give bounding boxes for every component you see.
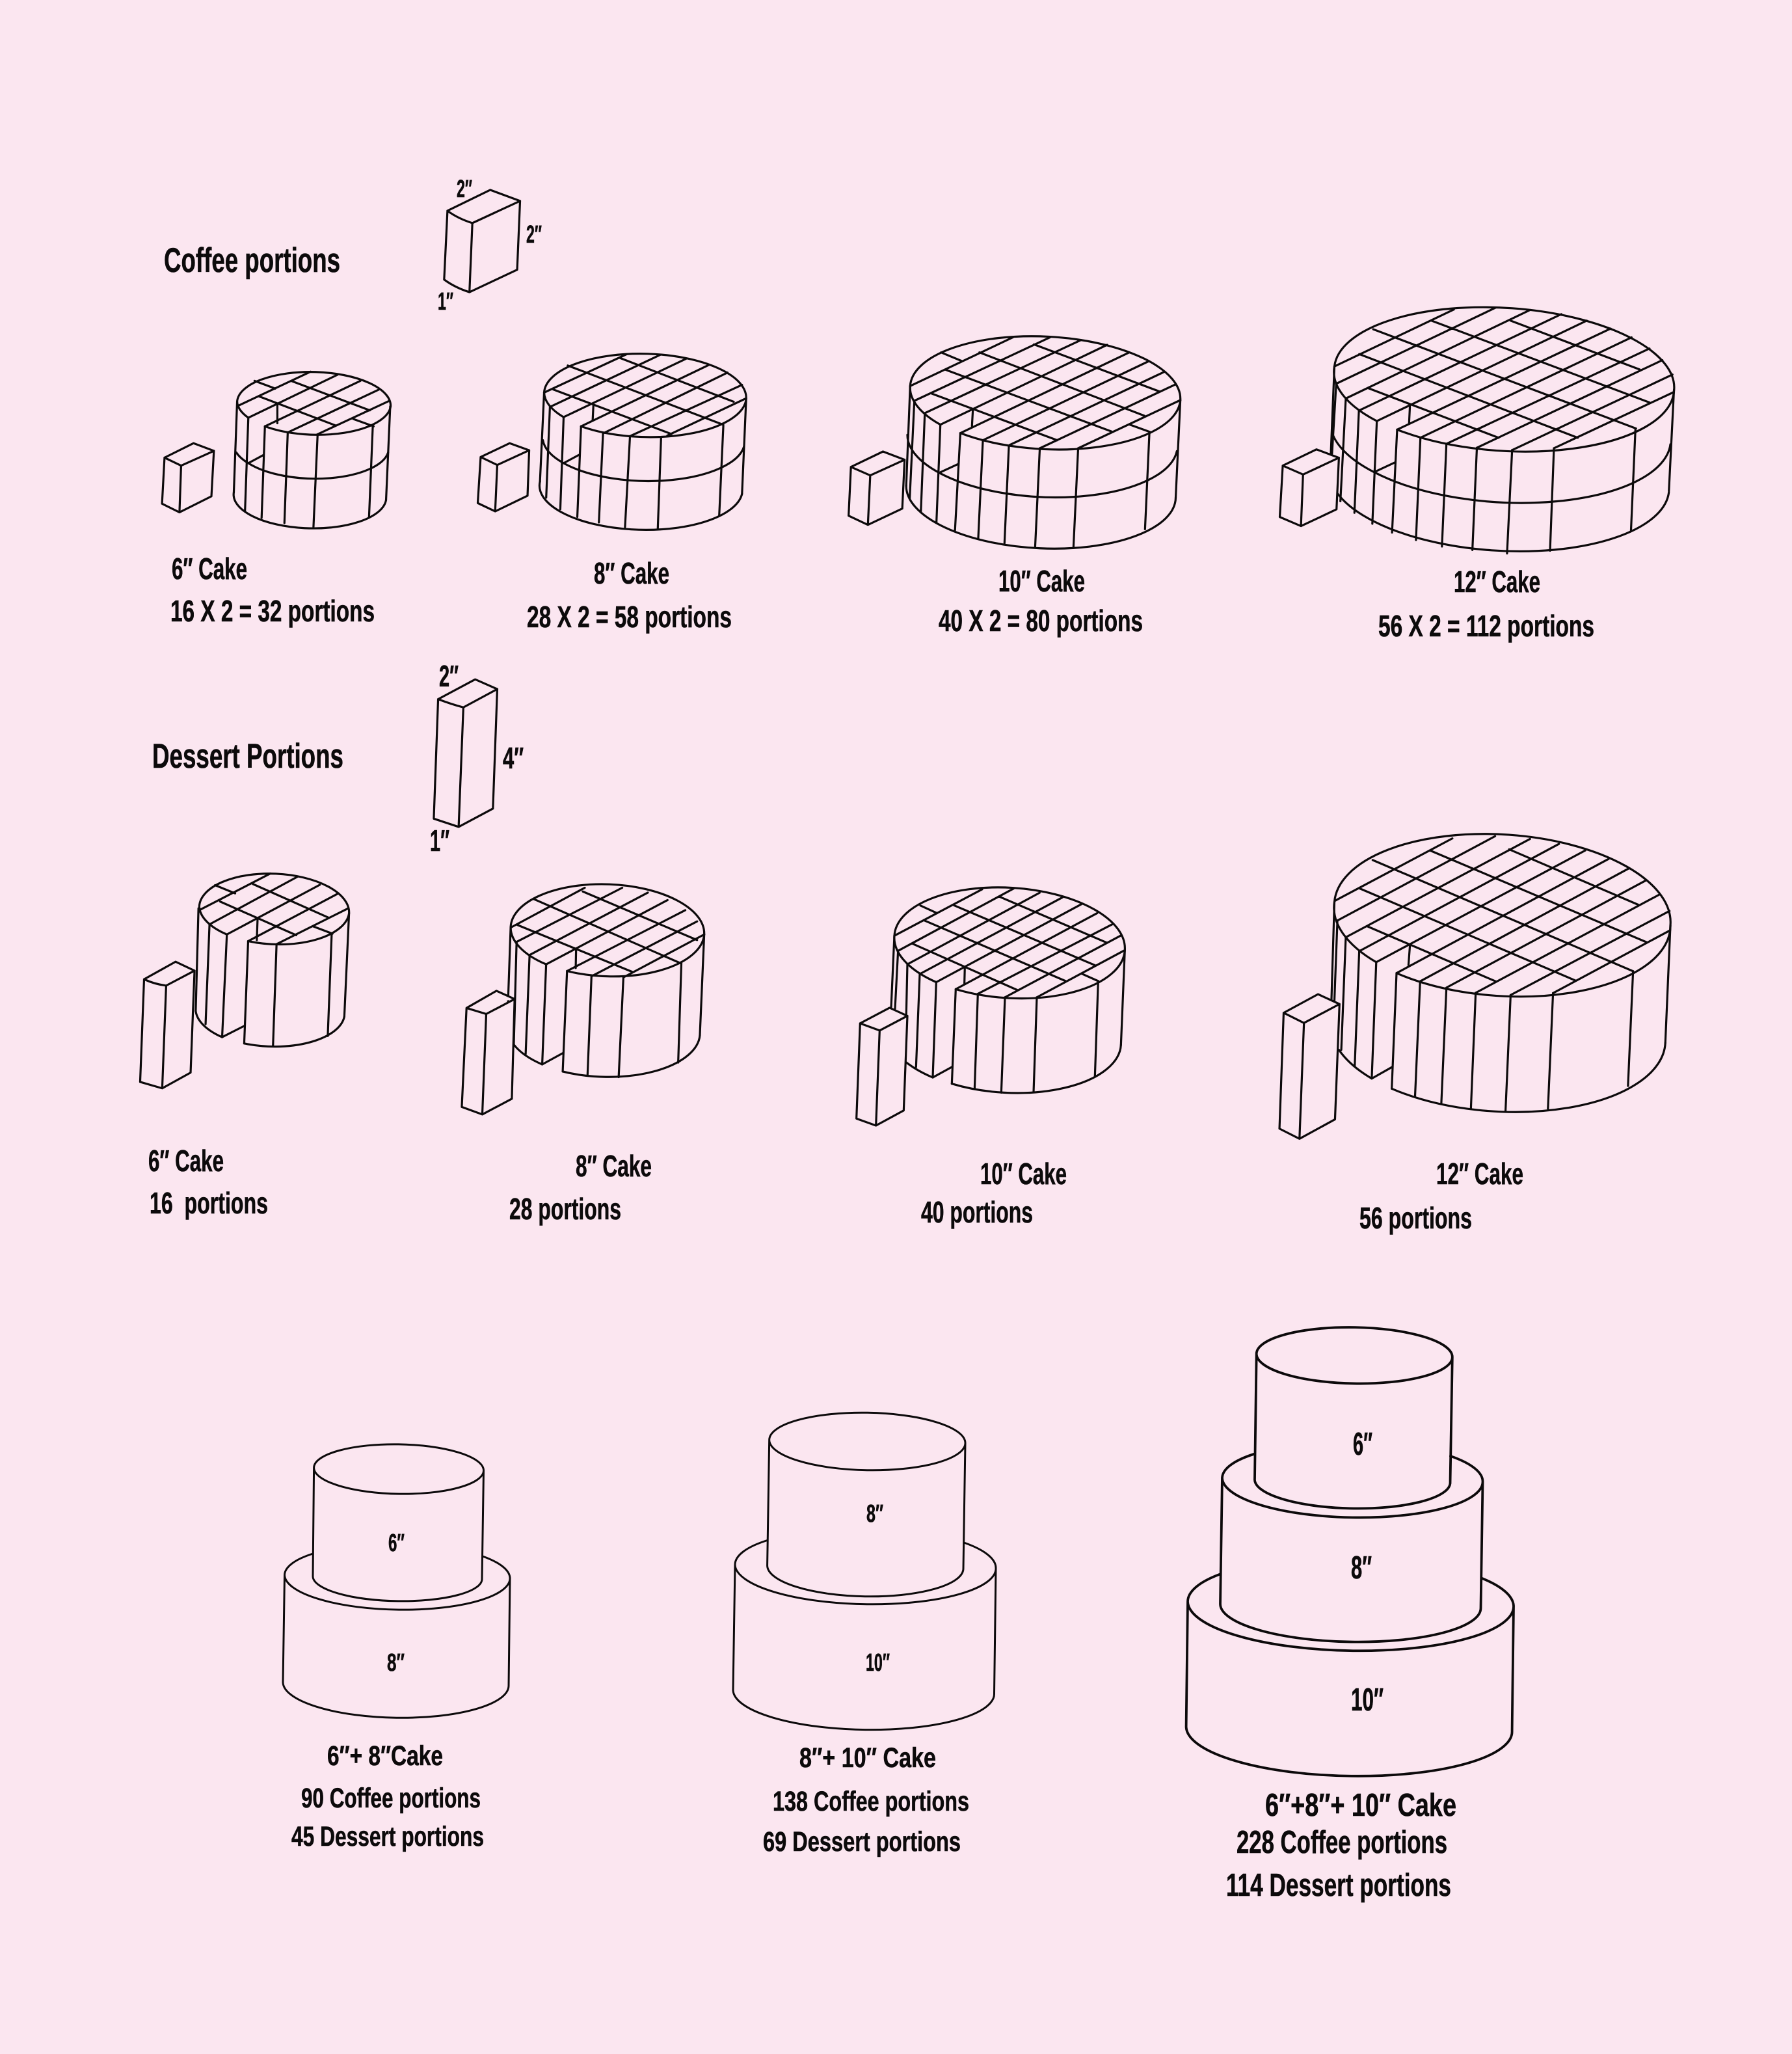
label: 10 inch dessert: 10″ Cake bbox=[980, 1157, 1067, 1191]
section: coffee portions bbox=[162, 176, 1674, 643]
label: three tier 6, 8 and 10 inch: 228 Coffee portions bbox=[1237, 1825, 1447, 1860]
label: two tier 6 and 8 inch bbox=[291, 1740, 484, 1852]
label: two tier 6 and 8 inch: 6″+ 8″Cake bbox=[327, 1740, 443, 1772]
dessert portion block bbox=[857, 1008, 907, 1126]
label: 8 inch dessert: 8″ Cake bbox=[576, 1149, 652, 1183]
cake: 8 inch dessert bbox=[462, 884, 704, 1115]
label: 6 inch coffee: 16 X 2 = 32 portions bbox=[170, 594, 375, 628]
label: 12 inch dessert: 12″ Cake bbox=[1436, 1157, 1523, 1191]
section: tiered cakes bbox=[283, 1327, 1514, 1903]
label: 10 inch coffee: 40 X 2 = 80 portions bbox=[939, 604, 1143, 638]
label: two tier 8 and 10 inch bbox=[763, 1742, 969, 1858]
label: 10 inch dessert: 40 portions bbox=[921, 1195, 1033, 1229]
icon: coffee portion block with dimensions bbox=[438, 176, 542, 316]
label: 12 inch dessert bbox=[1359, 1157, 1523, 1235]
label: 6 inch coffee: 6″ Cake bbox=[172, 552, 247, 586]
cake: three tier 6, 8 and 10 inch: 10″ bbox=[1351, 1682, 1384, 1718]
section: dessert portions bbox=[140, 659, 1670, 1235]
dessert portion block bbox=[1279, 994, 1339, 1139]
icon: coffee portion block with dimensions: 2″ bbox=[526, 221, 542, 249]
cake: 8 inch coffee bbox=[477, 354, 746, 530]
label: three tier 6, 8 and 10 inch: 114 Dessert portions bbox=[1226, 1868, 1451, 1903]
label: two tier 8 and 10 inch: 8″+ 10″ Cake bbox=[799, 1742, 936, 1774]
icon: coffee portion block with dimensions: 1″ bbox=[438, 288, 453, 316]
label: 12 inch coffee: 56 X 2 = 112 portions bbox=[1378, 609, 1594, 643]
coffee portion block bbox=[162, 443, 214, 512]
label: 8 inch dessert: 28 portions bbox=[509, 1192, 621, 1226]
icon: dessert portion block with dimensions: 1″ bbox=[430, 824, 449, 858]
cake: three tier 6, 8 and 10 inch bbox=[1186, 1327, 1514, 1776]
label: 6 inch dessert bbox=[148, 1144, 268, 1220]
cake: two tier 8 and 10 inch: 8″ bbox=[866, 1500, 883, 1528]
cake: 10 inch dessert bbox=[857, 887, 1125, 1126]
cake: two tier 8 and 10 inch bbox=[733, 1412, 996, 1730]
cake: two tier 6 and 8 inch: 8″ bbox=[387, 1649, 405, 1677]
heading: dessert portions: Dessert Portions bbox=[152, 737, 343, 776]
coffee portion block bbox=[477, 443, 529, 511]
cake: three tier 6, 8 and 10 inch: 8″ bbox=[1351, 1550, 1372, 1586]
cake: 6 inch dessert bbox=[140, 874, 349, 1088]
cake: 12 inch dessert bbox=[1279, 834, 1670, 1139]
label: 10 inch dessert bbox=[921, 1157, 1067, 1229]
label: 6 inch dessert: 6″ Cake bbox=[148, 1144, 224, 1178]
icon: dessert portion block with dimensions bbox=[430, 659, 524, 858]
cake: two tier 8 and 10 inch: 10″ bbox=[866, 1649, 890, 1677]
icon: dessert portion block with dimensions: 2″ bbox=[439, 659, 459, 693]
label: 12 inch coffee bbox=[1378, 565, 1594, 643]
cake: three tier 6, 8 and 10 inch: 6″ bbox=[1353, 1427, 1372, 1462]
label: two tier 6 and 8 inch: 90 Coffee portions bbox=[301, 1783, 481, 1814]
cake: 10 inch coffee bbox=[849, 336, 1181, 548]
label: 12 inch coffee: 12″ Cake bbox=[1454, 565, 1540, 599]
cake: two tier 6 and 8 inch bbox=[283, 1444, 510, 1718]
cake: 12 inch coffee bbox=[1279, 307, 1674, 554]
label: two tier 8 and 10 inch: 138 Coffee portions bbox=[773, 1786, 969, 1817]
label: 8 inch coffee bbox=[527, 556, 732, 634]
cake: 6 inch coffee bbox=[162, 372, 391, 528]
coffee portion block bbox=[1279, 450, 1339, 526]
label: two tier 8 and 10 inch: 69 Dessert portions bbox=[763, 1826, 961, 1858]
label: 6 inch coffee bbox=[170, 552, 375, 628]
label: three tier 6, 8 and 10 inch bbox=[1226, 1788, 1456, 1903]
icon: coffee portion block with dimensions: 2″ bbox=[457, 176, 472, 203]
label: 10 inch coffee bbox=[939, 564, 1143, 638]
icon: dessert portion block with dimensions: 4″ bbox=[503, 741, 524, 775]
dessert portion block bbox=[140, 962, 194, 1088]
label: 12 inch dessert: 56 portions bbox=[1359, 1201, 1472, 1235]
label: 10 inch coffee: 10″ Cake bbox=[998, 564, 1085, 598]
dessert portion block bbox=[462, 991, 515, 1115]
label: three tier 6, 8 and 10 inch: 6″+8″+ 10″ Cake bbox=[1265, 1788, 1456, 1823]
label: 8 inch coffee: 28 X 2 = 58 portions bbox=[527, 600, 732, 634]
label: 8 inch dessert bbox=[509, 1149, 652, 1226]
label: two tier 6 and 8 inch: 45 Dessert portions bbox=[291, 1821, 484, 1852]
label: 6 inch dessert: 16 portions bbox=[150, 1186, 268, 1220]
heading: coffee portions: Coffee portions bbox=[164, 241, 340, 280]
cake: two tier 6 and 8 inch: 6″ bbox=[388, 1530, 405, 1557]
label: 8 inch coffee: 8″ Cake bbox=[594, 556, 669, 590]
coffee portion block bbox=[849, 452, 905, 525]
